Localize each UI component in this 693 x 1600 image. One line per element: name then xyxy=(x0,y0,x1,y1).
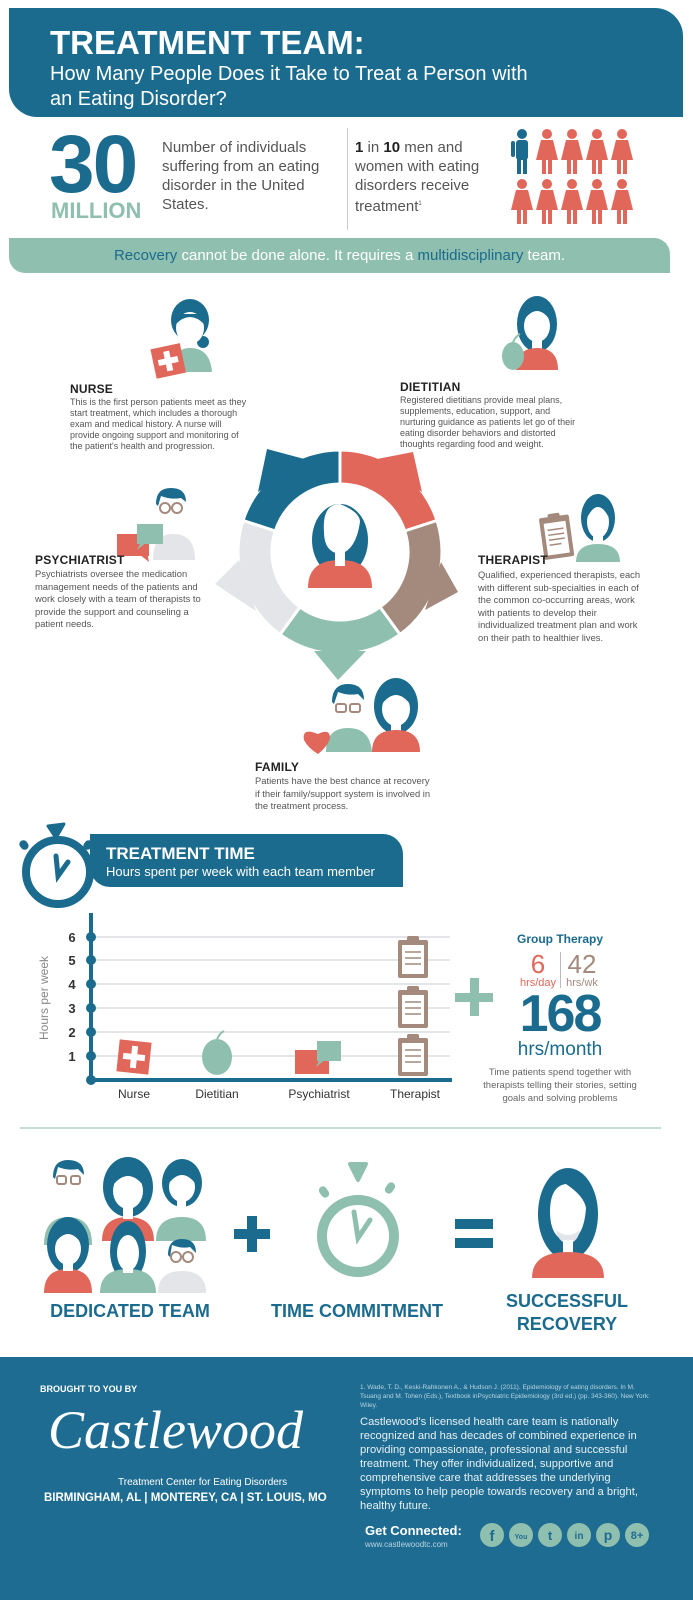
logo: castlewood: Treatment Center for Eating Disorders xyxy=(118,1477,287,1488)
stat: 30 million: MILLION xyxy=(51,198,141,223)
chart: hours per week: 2 xyxy=(68,1025,76,1040)
logo: castlewood: Castlewood xyxy=(48,1400,303,1460)
title: TREATMENT TEAM: xyxy=(50,24,365,61)
banner: recovery message: Recovery cannot be done alone. It requires a multidisciplinary team. xyxy=(114,247,565,264)
footer: about text: Castlewood's licensed health care team is nationally recognized and has decades of combined experience in providing compassionate, professional and successful treatment. They offer individualized, supportive and comprehensive care that addresses the underlying symptoms to help people towards recovery and a bright, healthy future. xyxy=(360,1416,638,1512)
icon: dietitian xyxy=(502,296,558,370)
icon: stopwatch xyxy=(19,822,94,908)
chart: hours per week: 1 xyxy=(68,1049,76,1064)
group therapy stats: Time patients spend together with therapists telling their stories, setting goals and solving problems xyxy=(483,1067,637,1104)
group therapy stats xyxy=(483,932,637,1104)
icons: social: t xyxy=(548,1528,553,1543)
stat: 30 million: 30 xyxy=(49,119,136,210)
group therapy stats: 6 xyxy=(531,949,545,979)
icons: social: in xyxy=(575,1531,583,1542)
group therapy stats: hrs/month xyxy=(518,1039,602,1060)
footer: citation: 1. Wade, T. D., Keski-Rahkonen A., & Hudson J. (2011). Epidemiology of eating disorders. In M. Tsuang and M. Tohen (Eds.), Textbook inPsychiatric Epidemiology (3rd ed.) (pp. 343-360). New York: Wiley. xyxy=(360,1384,650,1409)
group therapy stats: 42 xyxy=(568,949,596,979)
logo: castlewood: BIRMINGHAM, AL | MONTEREY, CA | ST. LOUIS, MO xyxy=(44,1492,327,1504)
chart: hours per week: Psychiatrist xyxy=(288,1087,350,1101)
icon: family xyxy=(304,678,420,754)
icon: psychiatrist xyxy=(117,488,195,562)
label: successful recovery: SUCCESSFUL RECOVERY xyxy=(506,1291,628,1334)
subtitle: How Many People Does it Take to Treat a Person with an Eating Disorder? xyxy=(50,63,528,110)
wheel: treatment team ring xyxy=(215,449,458,680)
chart: hours per week: Nurse xyxy=(118,1087,150,1101)
text: therapist: Qualified, experienced therapists, each with different sub-specialties in each of the common co-occurring areas, work with patients to develop their individualized treatment plan and work on their path to healthier lives. xyxy=(478,569,640,642)
text: psychiatrist: PSYCHIATRIST xyxy=(35,553,125,567)
icons: social: You xyxy=(515,1534,527,1541)
text: psychiatrist: Psychiatrists oversee the medication management needs of the patients and work closely with a team of therapists to provide the support and counseling a patient needs. xyxy=(35,568,201,629)
banner: recovery message xyxy=(9,238,670,273)
icon: patient xyxy=(308,504,372,588)
chart: hours per week: 6 xyxy=(68,930,76,945)
chart: hours per week: Hours per week xyxy=(37,955,51,1040)
icons: social: 8+ xyxy=(631,1530,643,1542)
icon: people grid xyxy=(511,129,633,224)
chart: hours per week xyxy=(37,913,452,1101)
icon: stopwatch (bottom) xyxy=(317,1162,399,1277)
text: therapist: THERAPIST xyxy=(478,553,548,567)
banner: treatment time xyxy=(90,834,403,887)
label: time commitment: TIME COMMITMENT xyxy=(271,1301,443,1321)
icon: therapist xyxy=(539,494,620,562)
group therapy stats: Group Therapy xyxy=(517,932,603,946)
footer: get connected: Get Connected: xyxy=(365,1523,462,1538)
footer: www.castlewoodtc.com xyxy=(365,1540,448,1549)
footer: brought to you by: BROUGHT TO YOU BY xyxy=(40,1384,137,1394)
text: family: Patients have the best chance at recovery if their family/support system is involved in the treatment process. xyxy=(255,775,430,811)
icon: equals xyxy=(455,1219,493,1248)
icon: plus xyxy=(455,978,493,1016)
footer xyxy=(0,1357,693,1600)
label: dedicated team: DEDICATED TEAM xyxy=(50,1301,210,1321)
header banner xyxy=(9,8,683,117)
chart: hours per week: 4 xyxy=(68,977,76,992)
text: family: FAMILY xyxy=(255,760,299,774)
text: nurse: This is the first person patients meet as they start treatment, which includes a thorough exam and medical history. A nurse will provide ongoing support and monitoring of the patient's health and progression. xyxy=(70,397,246,451)
chart: hours per week: 5 xyxy=(68,953,76,968)
icons: social: f xyxy=(490,1528,496,1545)
stat: 30 million xyxy=(49,119,319,223)
stat: 1 in 10: 1 in 10 men and women with eating disorders receive treatment1 xyxy=(355,139,479,215)
chart: hours per week: Therapist xyxy=(390,1087,441,1101)
group therapy stats: 168 xyxy=(520,985,600,1043)
logo: castlewood xyxy=(44,1400,327,1504)
banner: treatment time: TREATMENT TIME xyxy=(106,844,255,863)
icon: dedicated team group xyxy=(44,1157,206,1293)
chart: hours per week: 3 xyxy=(68,1001,76,1016)
icon: nurse xyxy=(150,299,212,379)
text: nurse: NURSE xyxy=(70,382,113,396)
icon: plus (bottom) xyxy=(234,1216,270,1252)
group therapy stats: hrs/wk xyxy=(566,977,598,989)
icons: social: p xyxy=(604,1527,612,1543)
icon: recovered person xyxy=(532,1168,604,1278)
banner: treatment time: Hours spent per week with each team member xyxy=(106,864,375,879)
chart: hours per week: Dietitian xyxy=(195,1087,239,1101)
text: dietitian: Registered dietitians provide meal plans, supplements, education, support, and nurturing guidance as patients let go of their eating disorder behaviors and distorted thoughts regarding food and weight. xyxy=(400,395,575,449)
text: dietitian: DIETITIAN xyxy=(400,380,460,394)
icons: social xyxy=(480,1523,649,1547)
stat: 30 million: Number of individuals suffering from an eating disorder in the United States. xyxy=(162,139,319,213)
group therapy stats: hrs/day xyxy=(520,977,556,989)
